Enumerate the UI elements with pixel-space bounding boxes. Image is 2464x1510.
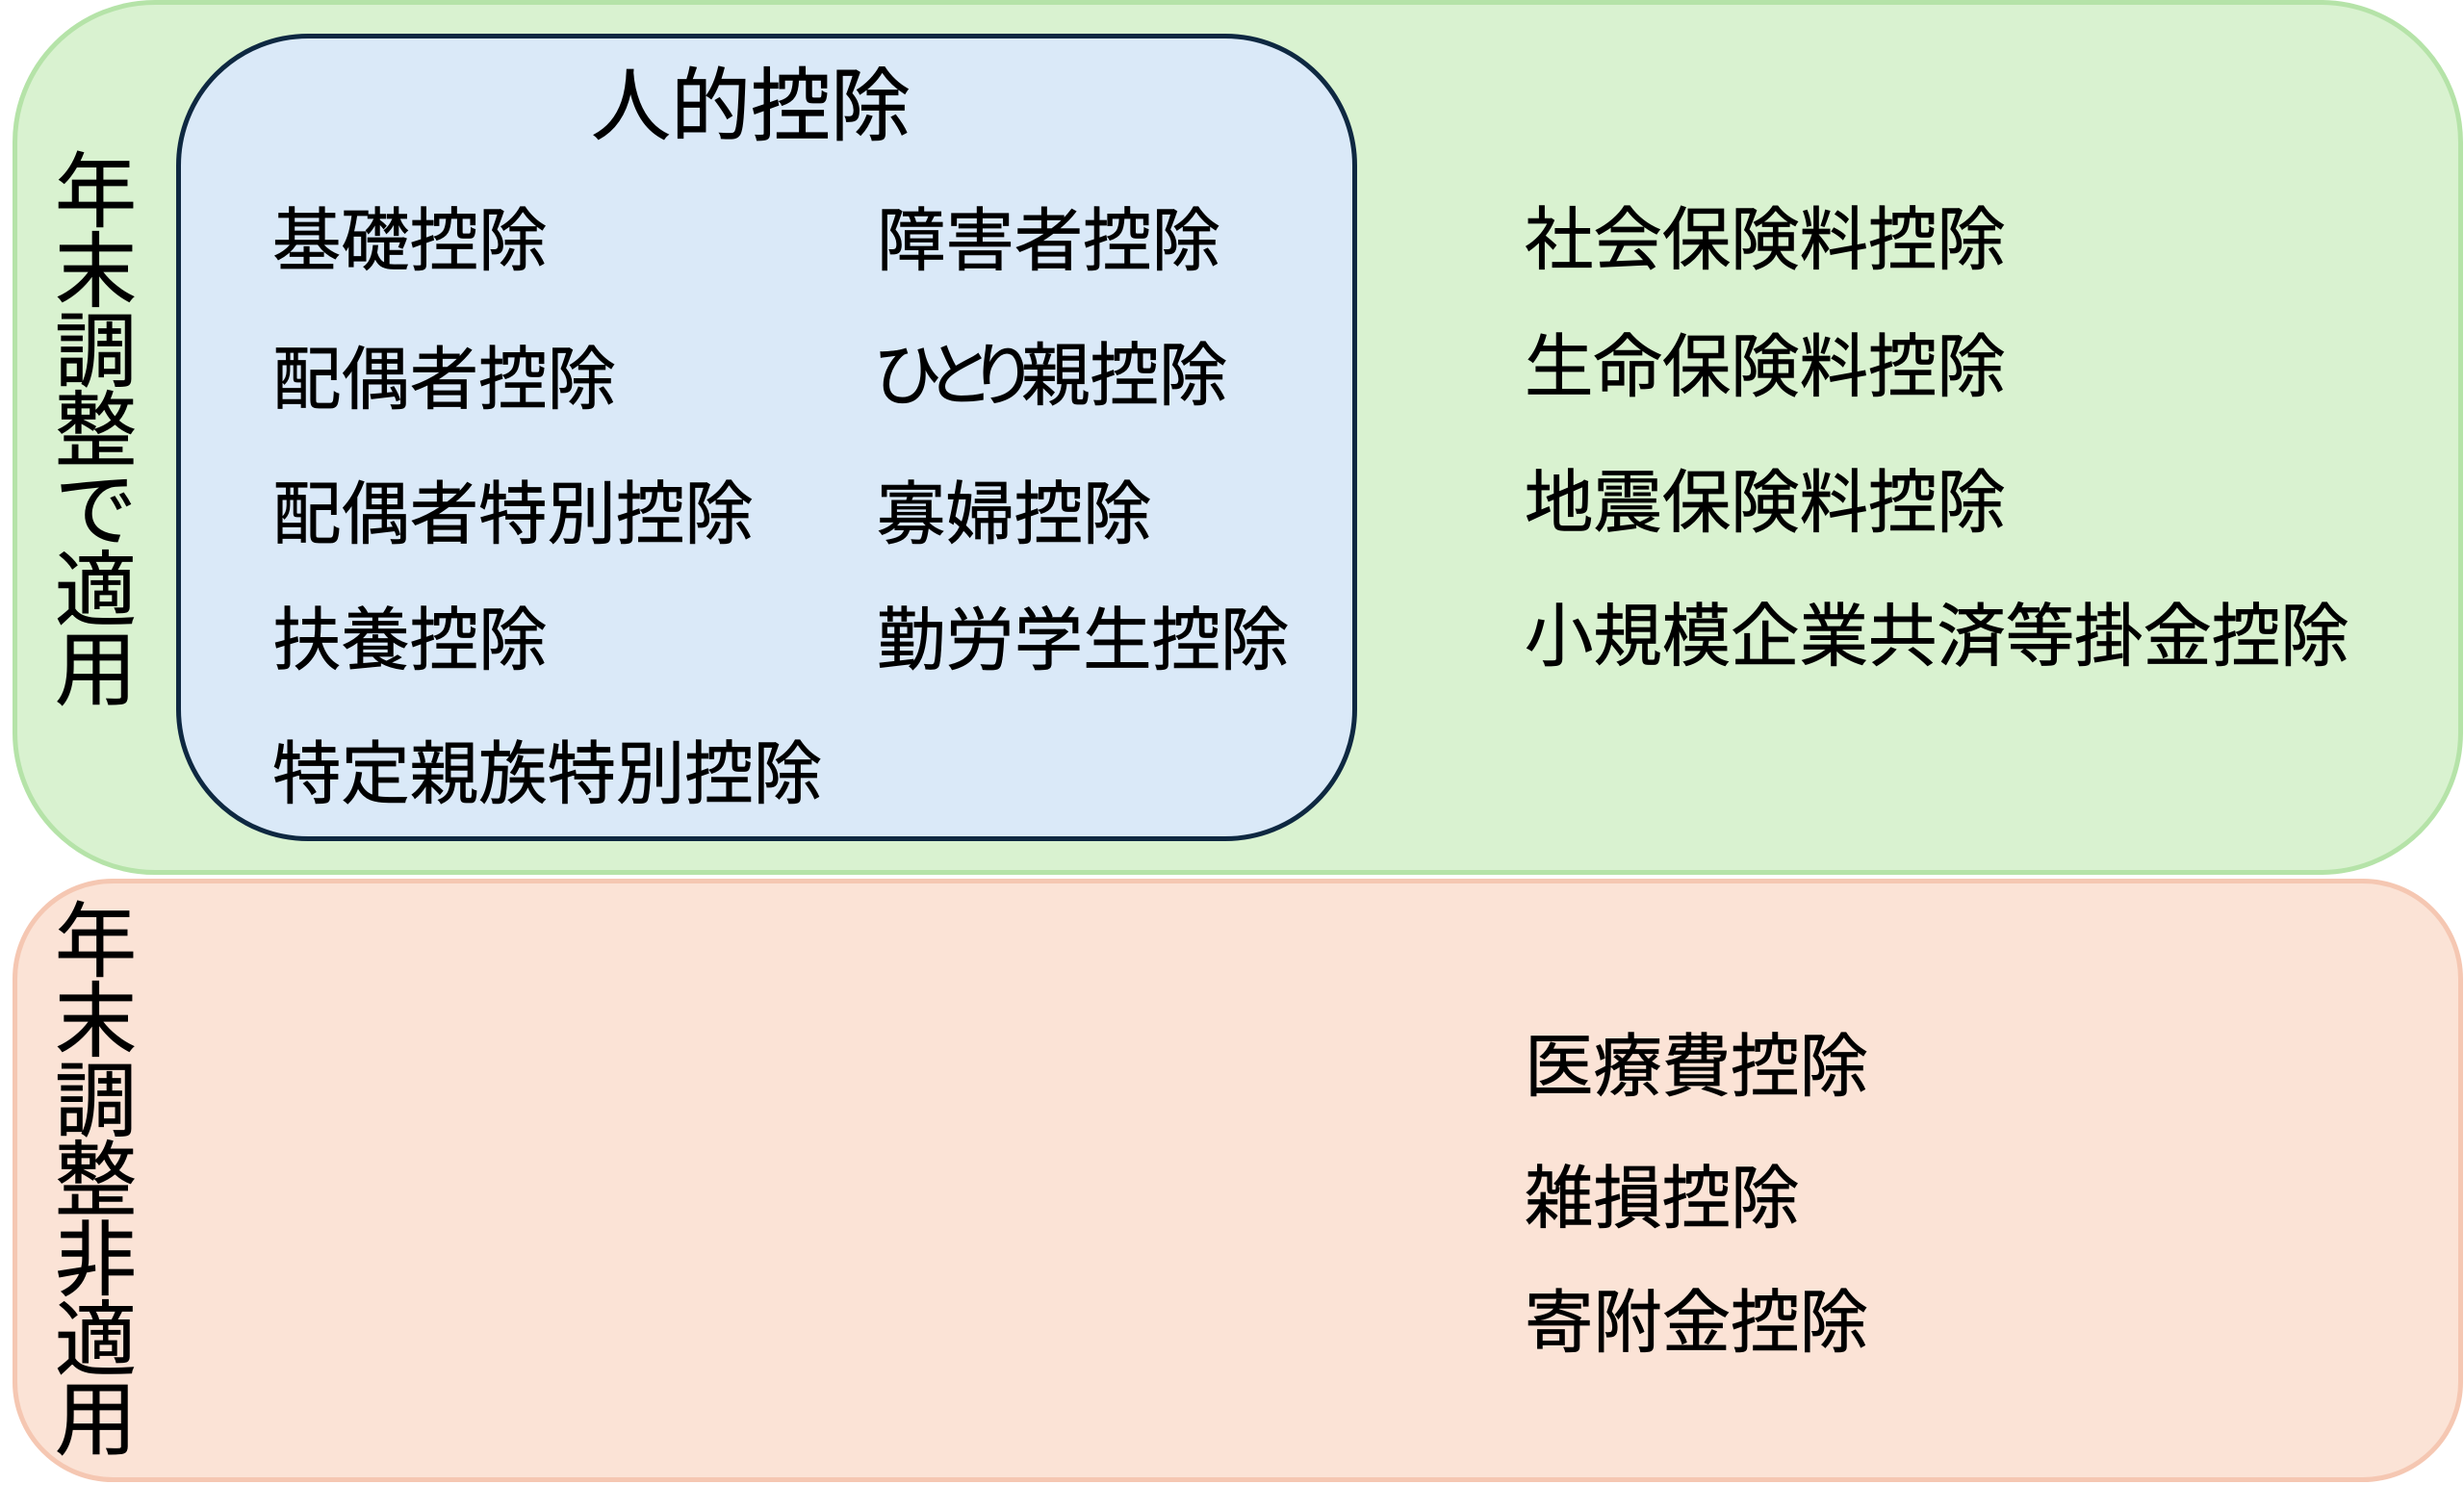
deduction: spouse: 配偶者控除 [272,342,616,419]
vertical label: year-end adjustment applicable: 用 [55,626,137,717]
panel: year-end adjustment applicable [13,0,2463,875]
vertical label: year-end adjustment not applicable: 用 [55,1375,137,1467]
vertical label: year-end adjustment not applicable: 末 [55,977,137,1068]
vertical label: year-end adjustment applicable: 年 [55,147,137,239]
vertical label: year-end adjustment applicable: 末 [55,227,137,319]
vertical label: year-end adjustment not applicable: 整 [55,1136,137,1227]
vertical label: year-end adjustment not applicable: 適 [55,1295,137,1387]
panel: personal deductions [176,34,1357,841]
deduction: casualty loss: 雑損控除 [1525,1161,1800,1238]
deduction: donations: 寄附金控除 [1525,1285,1868,1362]
deduction: specified relatives: 特定親族特別控除 [272,736,822,813]
vertical label: year-end adjustment not applicable: 調 [55,1057,137,1148]
deduction: basic: 基礎控除 [272,203,548,280]
deduction: special spouse: 配偶者特別控除 [272,476,754,553]
deduction: dependents: 扶養控除 [272,602,548,679]
deduction: working student: 勤労学生控除 [877,602,1289,679]
deduction: earthquake insurance: 地震保険料控除 [1525,465,2006,542]
vertical label: year-end adjustment not applicable: 非 [55,1216,137,1307]
vertical label: year-end adjustment applicable: 適 [55,546,137,637]
deduction: small business mutual aid: 小規模企業共済等掛金控除 [1525,599,2349,676]
vertical label: year-end adjustment applicable [55,147,137,717]
vertical label: year-end adjustment applicable: 調 [55,307,137,398]
panel: year-end adjustment not applicable [13,879,2463,1482]
vertical label: year-end adjustment applicable: 整 [55,386,137,477]
deduction: disability: 障害者控除 [877,203,1220,280]
deduction: medical expenses: 医療費控除 [1525,1029,1868,1106]
heading: personal deductions: 人的控除 [591,62,911,151]
deduction: widow: 寡婦控除 [877,476,1152,553]
deduction: social insurance: 社会保険料控除 [1525,202,2006,279]
vertical label: year-end adjustment applicable: で [55,466,137,557]
vertical label: year-end adjustment not applicable: 年 [55,897,137,988]
deduction: single parent: ひとり親控除 [873,338,1227,415]
vertical label: year-end adjustment not applicable [55,897,137,1467]
deduction: life insurance: 生命保険料控除 [1525,329,2006,406]
